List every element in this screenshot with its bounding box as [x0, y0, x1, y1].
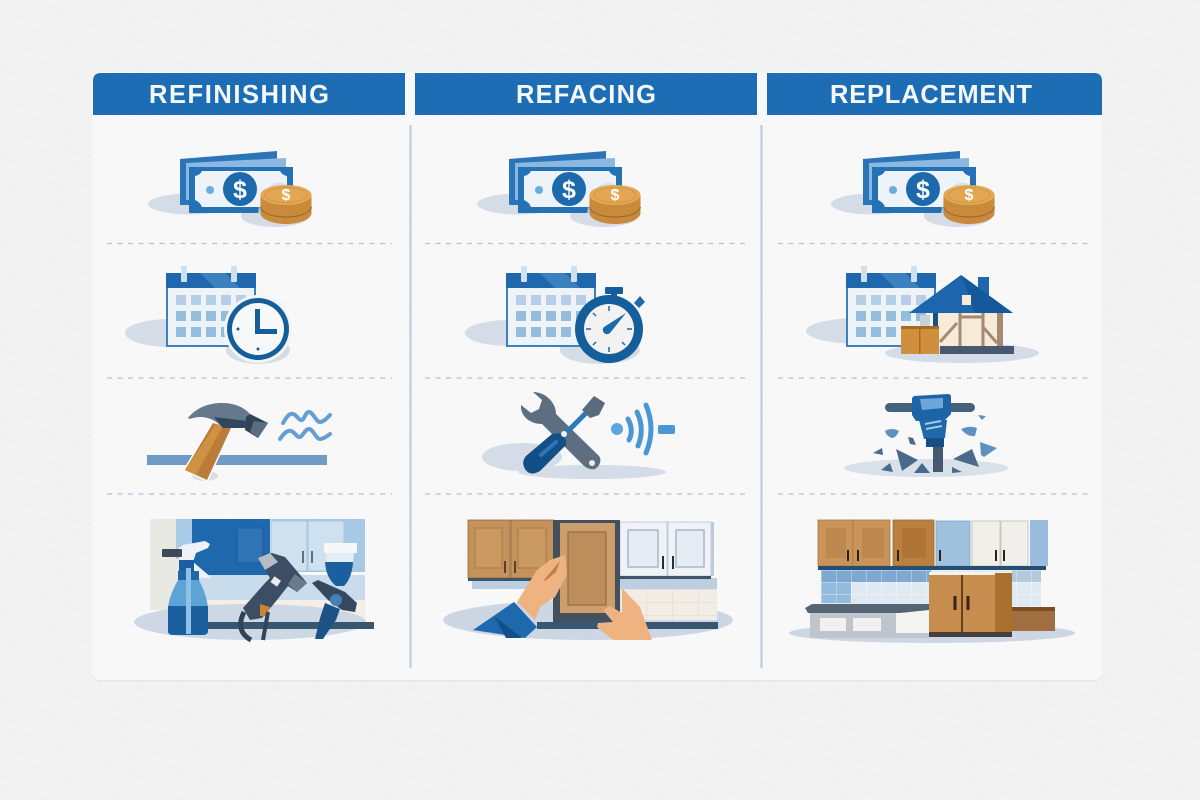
- illustration: new kitchen with island cabinet: [789, 520, 1075, 643]
- icon: calendar and house: [806, 266, 1039, 363]
- icon: money, refinishing: $: [282, 187, 291, 204]
- spray bottle: [162, 541, 212, 635]
- icon: calendar and stopwatch: [465, 266, 645, 364]
- icon: money, replacement: [831, 151, 994, 227]
- heading: replacement: REPLACEMENT: [830, 81, 1032, 109]
- heading: refacing: [415, 73, 757, 115]
- icon: money, replacement: $: [916, 176, 930, 204]
- illustration: kitchen with spray bottle, sander and spray gun: [134, 519, 374, 640]
- icon: wrench and screwdriver with sound: [482, 392, 675, 479]
- icon: jackhammer breaking debris: [844, 394, 1008, 477]
- icon: money, refinishing: $: [233, 176, 247, 204]
- illustration: hands fitting a new cabinet door: [443, 520, 733, 640]
- heading: replacement: [767, 73, 1102, 115]
- icon: calendar and clock: [125, 266, 292, 364]
- main card: [92, 72, 1102, 682]
- icon: money, refacing: $: [562, 176, 576, 204]
- heading: refinishing: [93, 73, 405, 115]
- icon: money, refinishing: [148, 151, 312, 227]
- icon: money, refacing: [477, 151, 640, 227]
- heading: refacing: REFACING: [516, 81, 656, 109]
- icon: money, refacing: $: [611, 187, 620, 204]
- spray gun: [312, 543, 357, 639]
- sander tool: [241, 553, 307, 640]
- icon: hammer on surface: [147, 403, 330, 481]
- heading: refinishing: REFINISHING: [149, 81, 329, 109]
- icon: money, replacement: $: [965, 187, 974, 204]
